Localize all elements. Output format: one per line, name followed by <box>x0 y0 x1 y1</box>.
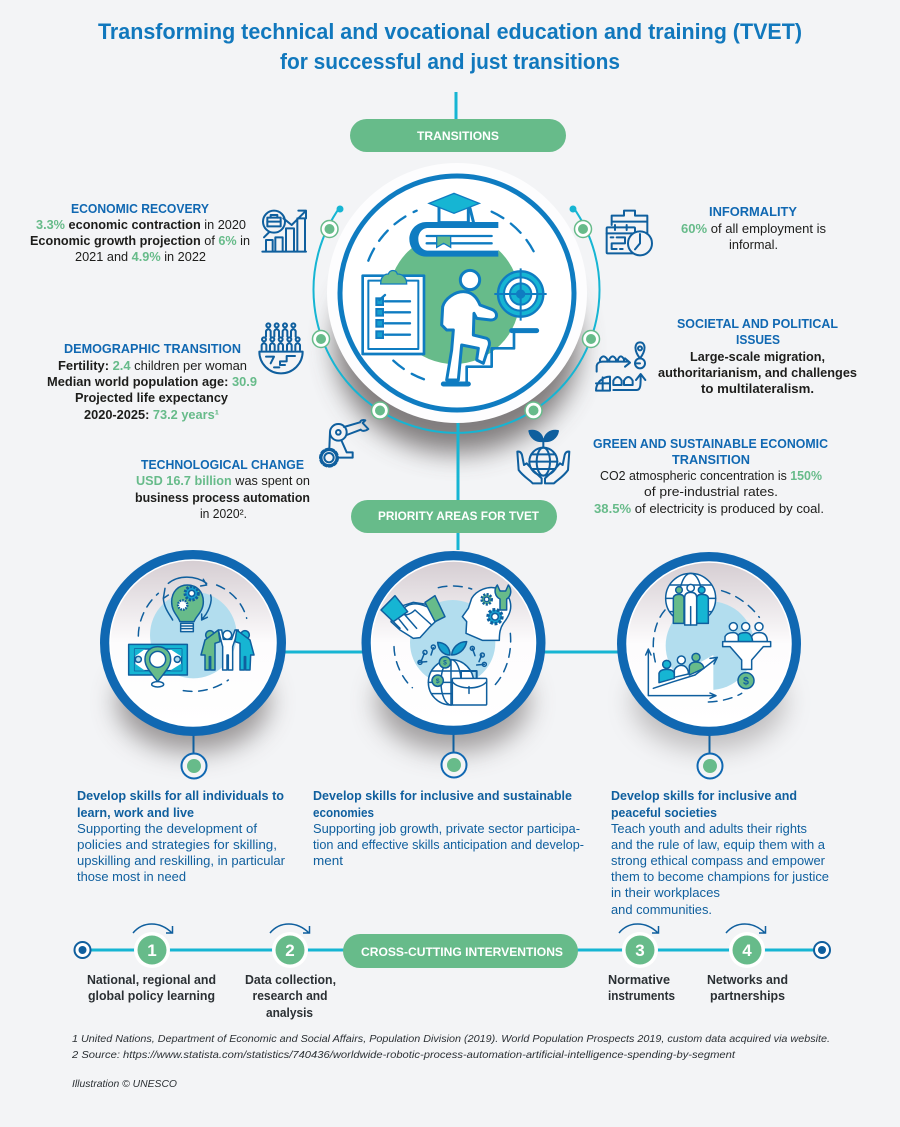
priority circle 2 <box>366 556 540 778</box>
column 1: skills for all: Supporting the development of <box>77 822 258 836</box>
footnotes: 2 Source: https://www.statista.com/statistics/740436/worldwide-robotic-process-automation-artificial-intelligence-spending-by-segment <box>71 1049 736 1061</box>
raised-arm people <box>206 631 214 639</box>
priority circle 1 <box>105 555 281 778</box>
column 2: sustainable economies: tion and effective skills anticipation and develop- <box>313 838 584 852</box>
timeline: cross-cutting interventions <box>74 924 830 968</box>
text: green and sustainable economic transition: CO2 atmospheric concentration is 150% <box>600 469 822 483</box>
timeline labels: instruments <box>608 989 675 1003</box>
text: demographic transition: DEMOGRAPHIC TRANSITION <box>64 342 241 356</box>
timeline: cross-cutting interventions: 3 <box>635 941 645 960</box>
column 2: sustainable economies: Supporting job growth, private sector participa- <box>313 822 580 836</box>
central circle shadow <box>335 237 579 453</box>
timeline labels: Data collection, <box>245 973 336 987</box>
text: economic recovery: 2021 and 4.9% in 2022 <box>75 250 206 264</box>
icon: technological change <box>320 420 368 466</box>
text: informality <box>681 205 826 252</box>
column 1: skills for all: those most in need <box>77 870 186 884</box>
column 1: skills for all: Develop skills for all individuals to <box>77 789 284 803</box>
central circle illustration <box>327 163 587 423</box>
column 2: sustainable economies: Develop skills for inclusive and sustainable <box>313 789 572 803</box>
column 1: skills for all <box>77 789 285 884</box>
text: demographic transition: 2020-2025: 73.2 years¹ <box>84 408 219 422</box>
icon: informality <box>607 211 652 255</box>
text: green and sustainable economic transition <box>593 437 828 516</box>
text: demographic transition <box>47 342 257 422</box>
text: economic recovery: ECONOMIC RECOVERY <box>71 202 210 216</box>
text: informality: 60% of all employment is <box>681 222 826 236</box>
sprouts <box>418 648 484 665</box>
timeline labels <box>87 973 788 1020</box>
icon: economic recovery <box>262 211 306 252</box>
text: informality: informal. <box>729 238 778 252</box>
timeline: cross-cutting interventions: CROSS-CUTTING INTERVENTIONS <box>361 945 563 959</box>
footnotes: 1 United Nations, Department of Economic and Social Affairs, Population Division (2019). World Population Prospects 2019, custom data acquired via website. <box>72 1033 830 1045</box>
icon: green and sustainable economic transition <box>517 431 569 483</box>
timeline labels: analysis <box>266 1006 313 1020</box>
timeline: cross-cutting interventions: 4 <box>742 941 752 960</box>
column 1: skills for all: upskilling and reskilling, in particular <box>77 854 285 868</box>
column 3: peaceful societies: strong ethical compass and empower <box>611 854 825 868</box>
head <box>462 588 511 640</box>
arc <box>313 206 599 433</box>
pill: transitions: TRANSITIONS <box>417 129 499 143</box>
column 3: peaceful societies: Teach youth and adults their rights <box>611 822 807 836</box>
connector lines between priority circles <box>285 650 620 654</box>
title: Transforming technical and vocational education and training (TVET) <box>98 19 802 44</box>
timeline: cross-cutting interventions: 1 <box>147 941 157 960</box>
column 1: skills for all: learn, work and live <box>77 806 194 820</box>
text: societal and political issues: to multilateralism. <box>701 382 814 396</box>
column 3: peaceful societies <box>611 789 829 917</box>
column 3: peaceful societies: peaceful societies <box>611 806 717 820</box>
priority circle 3 <box>622 557 796 778</box>
connector line: central to priority areas <box>456 420 460 550</box>
priority circle 3: $ <box>743 676 749 688</box>
icon: societal and political issues <box>596 342 645 391</box>
column 3: peaceful societies: and communities. <box>611 903 712 917</box>
timeline labels: National, regional and <box>87 973 216 987</box>
text: economic recovery: 3.3% economic contraction in 2020 <box>36 218 246 232</box>
column 3: peaceful societies: in their workplaces <box>611 886 720 900</box>
person <box>460 270 480 290</box>
pill: priority areas: PRIORITY AREAS FOR TVET <box>378 509 540 523</box>
timeline labels: Normative <box>608 973 670 987</box>
text: societal and political issues: Large-scale migration, <box>690 350 825 364</box>
text: demographic transition: Fertility: 2.4 children per woman <box>58 359 247 373</box>
text: green and sustainable economic transition: TRANSITION <box>672 453 750 467</box>
footnotes: Illustration © UNESCO <box>72 1078 177 1090</box>
text: technological change: in 2020². <box>200 507 247 521</box>
handshake <box>391 602 442 638</box>
arc nodes <box>312 220 600 419</box>
title <box>98 19 802 74</box>
priority circle 2: $ <box>436 678 440 685</box>
target <box>498 271 543 317</box>
column 3: peaceful societies: them to become champions for justice <box>611 870 829 884</box>
text: demographic transition: Median world population age: 30.9 <box>47 375 257 389</box>
clipboard <box>363 276 424 354</box>
text: green and sustainable economic transition: GREEN AND SUSTAINABLE ECONOMIC <box>593 437 828 451</box>
globe and briefcase <box>428 660 474 705</box>
column 3: peaceful societies: and the rule of law, equip them with a <box>611 838 825 852</box>
text: technological change: TECHNOLOGICAL CHANGE <box>141 458 304 472</box>
timeline labels: global policy learning <box>88 989 215 1003</box>
text: societal and political issues: SOCIETAL AND POLITICAL <box>677 317 838 331</box>
text: technological change: business process automation <box>135 491 310 505</box>
footnotes <box>71 1033 830 1090</box>
text: economic recovery: Economic growth projection of 6% in <box>30 234 250 248</box>
text: green and sustainable economic transition: 38.5% of electricity is produced by coal. <box>594 502 824 516</box>
timeline labels: research and <box>252 989 328 1003</box>
cap and books <box>439 207 468 223</box>
text: economic recovery <box>30 202 250 264</box>
pill: priority areas <box>351 500 557 533</box>
text: green and sustainable economic transition: of pre-industrial rates. <box>644 485 778 499</box>
text: informality: INFORMALITY <box>709 205 798 219</box>
timeline labels: partnerships <box>710 989 785 1003</box>
timeline: cross-cutting interventions: 2 <box>285 941 295 960</box>
column 1: skills for all: policies and strategies for skilling, <box>77 838 277 852</box>
stairs <box>443 331 537 384</box>
text: demographic transition: Projected life expectancy <box>75 391 228 405</box>
priority circle 2: $ <box>443 660 447 667</box>
icon: demographic transition <box>259 323 303 373</box>
text: technological change: USD 16.7 billion was spent on <box>136 474 310 488</box>
connector line: top <box>454 92 458 122</box>
column 2: sustainable economies: ment <box>313 854 344 868</box>
pill: transitions <box>350 119 566 152</box>
timeline labels: Networks and <box>707 973 788 987</box>
column 2: sustainable economies <box>313 789 584 868</box>
text: societal and political issues <box>658 317 857 396</box>
text: societal and political issues: ISSUES <box>736 333 780 347</box>
column 3: peaceful societies: Develop skills for inclusive and <box>611 789 797 803</box>
title: for successful and just transitions <box>280 49 620 74</box>
text: societal and political issues: authoritarianism, and challenges <box>658 366 857 380</box>
text: technological change <box>135 458 310 521</box>
column 2: sustainable economies: economies <box>313 806 374 820</box>
